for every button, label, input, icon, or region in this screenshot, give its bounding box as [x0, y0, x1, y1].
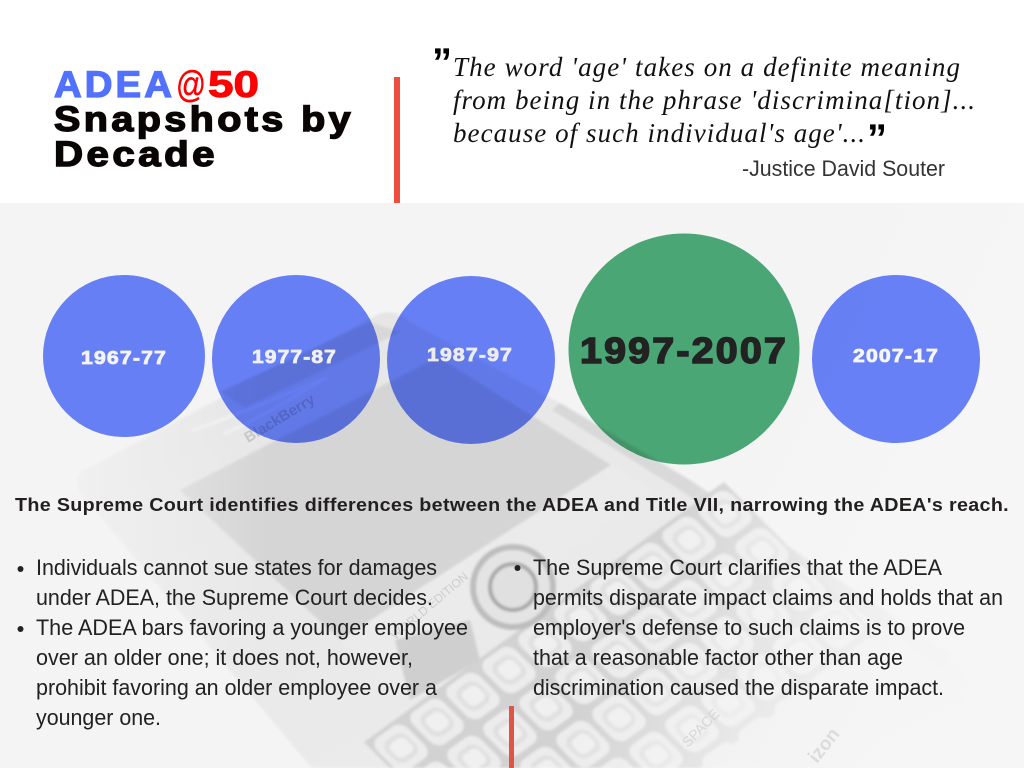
decade circle: 1997-2007 highlighted: [568, 234, 800, 464]
background panel with phone photo: izon: [804, 724, 844, 767]
left bullet list: The ADEA bars favoring a younger employee: [36, 615, 468, 640]
header panel: [0, 0, 1024, 203]
trackball: [473, 547, 553, 627]
decade circle: 1987-97: 1987-97: [427, 345, 513, 365]
phone image: [77, 312, 968, 768]
quote: ”: [867, 117, 887, 161]
decade circle: 1967-77: [43, 275, 205, 437]
right bullet list: employer's defense to such claims is to prove: [533, 615, 965, 640]
title: @: [176, 64, 206, 105]
red divider: [394, 77, 400, 203]
title: Decade: [54, 135, 218, 174]
decade summary heading: The Supreme Court identifies differences between the ADEA and Title VII, narrowing the ADEA's reach.: [15, 495, 1009, 515]
quote attribution: -Justice David Souter: [742, 156, 945, 181]
title: 50: [208, 64, 259, 105]
title: Snapshots by: [54, 100, 354, 139]
title: [54, 64, 354, 174]
left bullet list: younger one.: [36, 705, 161, 730]
decade circle: 1977-87: [212, 275, 380, 443]
right bullet list: discrimination caused the disparate impact.: [533, 675, 944, 700]
right bullet list: [514, 555, 1003, 700]
left bullet list: Individuals cannot sue states for damages: [36, 555, 437, 580]
right bullet list: The Supreme Court clarifies that the ADEA: [533, 555, 942, 580]
quote: [432, 41, 975, 161]
keyboard: [364, 482, 880, 768]
left bullet list: [18, 555, 468, 730]
bottom red divider: [509, 706, 514, 768]
quote: because of such individual's age'...: [453, 118, 865, 148]
title: ADEA: [54, 64, 175, 105]
decade circle: 2007-17: [812, 275, 980, 443]
phone brand text: BlackBerry: [241, 391, 319, 446]
quote: ”: [432, 41, 452, 85]
background panel with phone photo: SPACE: [679, 706, 722, 750]
right bullet list: permits disparate impact claims and holds that an: [533, 585, 1003, 610]
decade circle: 1997-2007 highlighted: 1997-2007: [580, 330, 788, 371]
left bullet list: over an older one; it does not, however,: [36, 645, 413, 670]
decade circle: 1967-77: 1967-77: [81, 348, 167, 368]
decade circle: 2007-17: 2007-17: [853, 346, 939, 366]
decade circle: 1987-97: [387, 276, 555, 444]
decade circle: 1977-87: 1977-87: [252, 347, 337, 367]
background panel with phone photo: WORLD EDITION: [388, 569, 471, 642]
quote: from being in the phrase 'discrimina[tion]...: [453, 85, 975, 115]
quote: The word 'age' takes on a definite meaning: [453, 52, 960, 82]
background panel with phone photo: [0, 203, 1024, 768]
left bullet list: under ADEA, the Supreme Court decides.: [36, 585, 433, 610]
right side fade of photo: [0, 203, 1024, 768]
left bullet list: prohibit favoring an older employee over a: [36, 675, 438, 700]
right bullet list: that a reasonable factor other than age: [533, 645, 903, 670]
